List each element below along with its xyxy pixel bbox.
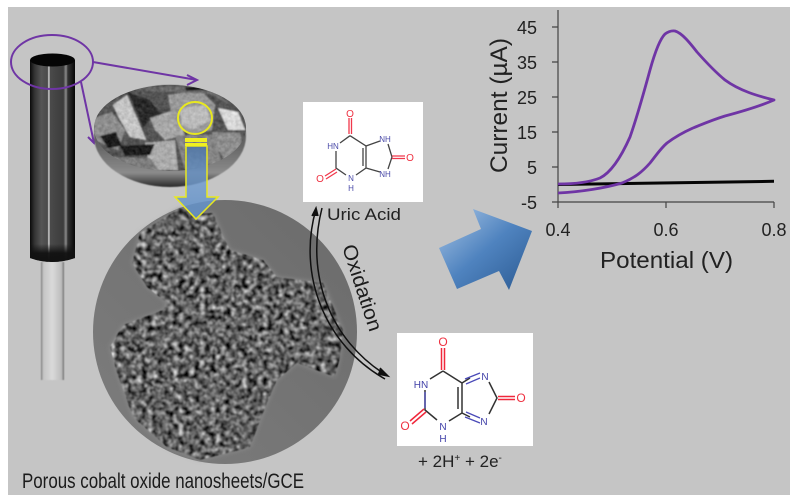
caption: Porous cobalt oxide nanosheets/GCE — [22, 470, 304, 493]
panel: oxidized product structure: O — [438, 335, 448, 349]
x axis tick labels: 0.8 — [761, 220, 787, 240]
panel: uric acid structure: NH — [379, 170, 391, 179]
icon: yellow highlight circle — [178, 102, 212, 134]
panel: uric acid structure: H — [348, 184, 354, 193]
x axis tick labels: 0.6 — [653, 220, 679, 240]
black baseline curve — [558, 181, 774, 184]
panel: uric acid structure: HN — [327, 142, 339, 151]
chart: cyclic voltammogram — [486, 10, 787, 273]
chart axes — [552, 10, 774, 208]
x axis title: Potential (V) — [600, 247, 733, 273]
y axis tick labels: 35 — [517, 53, 537, 73]
panel: oxidized product structure: H — [439, 434, 447, 445]
x axis tick labels: 0.4 — [545, 220, 571, 240]
panel: oxidized product structure: O — [400, 419, 410, 433]
label: Uric Acid: Uric Acid — [327, 205, 401, 224]
label: Oxidation: Oxidation — [337, 242, 386, 334]
panel: oxidized product structure: N — [481, 372, 489, 383]
panel: oxidized product structure: N — [480, 417, 488, 428]
label: reaction products: - — [499, 453, 502, 464]
icon: glassy carbon electrode — [30, 54, 75, 380]
label: reaction products: + 2H — [418, 452, 454, 471]
image: SEM of nanosheets — [90, 80, 250, 187]
panel: oxidized product structure — [397, 333, 533, 446]
panel: uric acid structure — [303, 102, 423, 202]
panel: uric acid structure: NH — [379, 135, 391, 144]
panel: oxidized product structure: HN — [414, 380, 428, 391]
y axis tick labels: -5 — [521, 193, 537, 213]
y axis tick labels: 15 — [517, 123, 537, 143]
y axis tick labels: 5 — [527, 158, 537, 178]
x axis tick labels — [545, 220, 787, 240]
arrow: yellow zoom arrow — [175, 138, 218, 219]
panel: uric acid structure: O — [316, 174, 324, 185]
y axis tick labels: 25 — [517, 88, 537, 108]
purple CV curve — [558, 31, 774, 193]
panel: uric acid structure: N — [348, 174, 354, 183]
icon: purple highlight ellipse on electrode tip — [11, 35, 93, 89]
y axis tick labels: 45 — [517, 18, 537, 38]
panel: uric acid structure: O — [406, 153, 414, 164]
arrow: double curved oxidation arrow — [310, 208, 388, 379]
image: TEM of porous cobalt oxide nanosheet — [93, 200, 357, 465]
panel: oxidized product structure: N — [439, 422, 447, 433]
label: reaction products: + — [454, 453, 460, 464]
panel: oxidized product structure: O — [516, 391, 526, 405]
arrow: electrode tip to SEM view — [93, 62, 197, 85]
arrow: large blue arrow — [439, 209, 532, 290]
y axis tick labels — [517, 18, 537, 213]
panel: uric acid structure: O — [346, 109, 354, 120]
arrow: electrode surface to SEM view — [81, 82, 97, 143]
label: reaction products: + 2e — [460, 452, 499, 471]
y axis title: Current (µA) — [486, 38, 513, 173]
